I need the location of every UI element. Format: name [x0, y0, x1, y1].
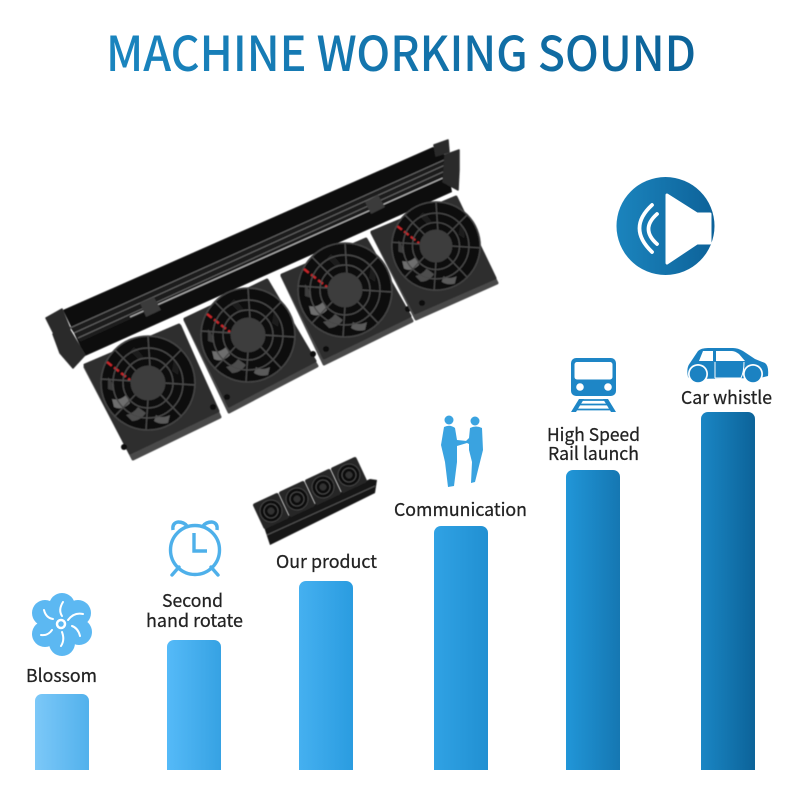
icon: blossom: [32, 593, 92, 656]
label: High Speed Rail launch: [547, 421, 640, 466]
icon: car: [687, 348, 768, 384]
rail end caps: [46, 140, 459, 368]
label: High Speed Rail launch: High Speed: [547, 421, 640, 447]
fan module 4: [372, 197, 497, 319]
icon: alarm clock: [170, 522, 220, 575]
label: Car whistle: Car whistle: [681, 384, 772, 410]
rail clips: [140, 195, 385, 317]
label: High Speed Rail launch: Rail launch: [548, 440, 639, 466]
icon: product thumbnail: [252, 456, 377, 545]
bar: Blossom: [35, 694, 89, 770]
label: Communication: Communication: [394, 496, 527, 522]
bar: Our product: [299, 581, 353, 770]
label: Second hand rotate: [146, 587, 243, 633]
icon: two people shaking hands: [441, 416, 483, 487]
label: Second hand rotate: hand rotate: [146, 607, 243, 633]
icon: speaker in circle: [616, 177, 714, 275]
label: Our product: Our product: [276, 548, 377, 574]
bar: Car whistle: [701, 412, 755, 770]
bar: Second hand rotate: [167, 640, 221, 770]
fan module 2: [185, 280, 317, 412]
aluminium rail: [63, 147, 452, 356]
icon: train on rails: [571, 358, 616, 412]
fan module 3: [282, 239, 412, 364]
product photo: four-fan cooling unit: [46, 140, 497, 459]
label: Blossom: Blossom: [26, 662, 97, 688]
bar: Communication: [434, 526, 488, 770]
label: Second hand rotate: Second: [162, 587, 223, 613]
title: MACHINE WORKING SOUND: [106, 15, 696, 85]
bar chart: sound level comparison: [35, 412, 755, 770]
fan module 1: [85, 325, 220, 459]
bar: High Speed Rail launch: [566, 470, 620, 770]
